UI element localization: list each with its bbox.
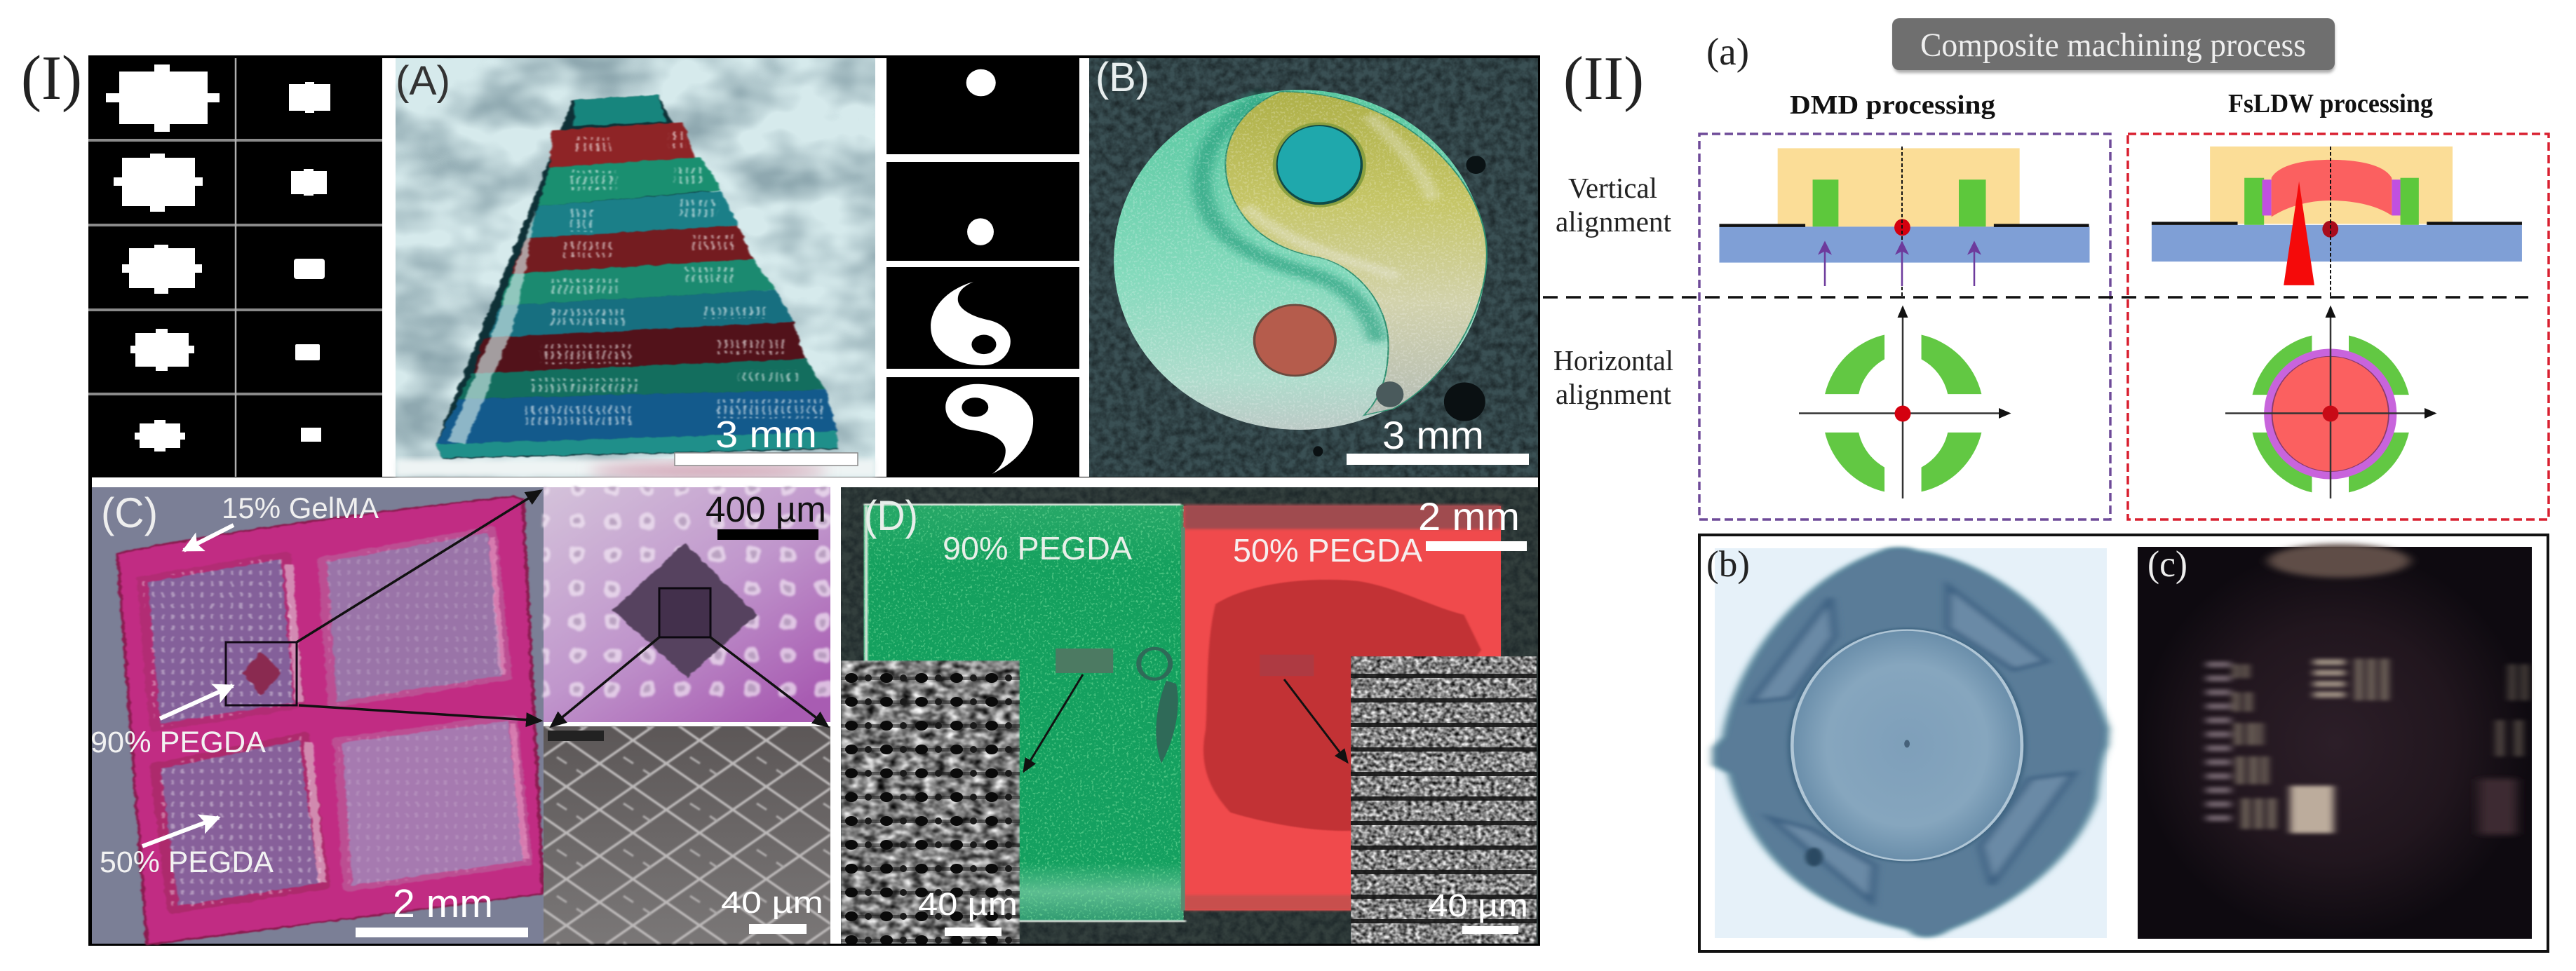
dark diamond <box>613 543 757 677</box>
white separator <box>830 487 841 944</box>
scale text: 2 mm: 2 mm <box>1418 494 1520 538</box>
white separator band <box>92 477 1538 487</box>
axes <box>1799 307 2009 498</box>
center dot <box>1895 405 1910 422</box>
scale bar <box>945 928 1002 936</box>
D inset arrows <box>1024 674 1347 771</box>
label: (D): (D) <box>864 492 918 539</box>
inner zoom box <box>659 588 710 637</box>
scale bar <box>1462 926 1518 934</box>
white arrows <box>142 525 234 846</box>
row label: vertical alignment: alignment <box>1556 205 1672 238</box>
panel: A pyramid photo <box>382 58 886 478</box>
green and red gels <box>864 505 1501 921</box>
panel: D gel photo <box>841 487 1538 944</box>
panel: C SEM lattice <box>544 722 830 944</box>
horizontal alignment diagram <box>1825 335 1981 491</box>
scale text: 40 µm: 40 µm <box>721 885 823 920</box>
heading: DMD processing: DMD processing <box>1790 90 1995 120</box>
label: 15% GelMA: 15% GelMA <box>222 491 379 524</box>
axes <box>2225 307 2435 498</box>
SEM info tag <box>548 731 604 741</box>
button: composite machining process <box>1892 18 2335 73</box>
row label: vertical alignment <box>1556 172 1672 238</box>
left column cross shapes <box>106 64 220 451</box>
row label: horizontal alignment: alignment <box>1556 378 1672 410</box>
yin-yang disc <box>1114 90 1487 430</box>
scale bar <box>1426 541 1527 551</box>
panel: B yin-yang photo <box>1089 55 1538 477</box>
panel: (c) imaging test pattern <box>2138 544 2532 939</box>
purple arrows <box>1825 243 1974 286</box>
mottled background <box>396 58 875 477</box>
panel: (b) microlens image <box>1706 544 2108 938</box>
label: (c): (c) <box>2147 544 2187 585</box>
lens object <box>1714 548 2108 937</box>
pyramid layers <box>436 95 837 459</box>
pink floor <box>396 459 875 477</box>
scale bar <box>749 924 807 934</box>
row label: horizontal alignment <box>1553 344 1673 410</box>
scale text: 3 mm: 3 mm <box>1382 413 1484 457</box>
mask shapes <box>931 69 1033 474</box>
panel: DMD processing schematic <box>1699 134 2110 520</box>
panel: FsLDW processing schematic <box>2128 134 2549 520</box>
label: 50% PEGDA: 50% PEGDA <box>1233 532 1422 569</box>
scale bar <box>675 453 858 466</box>
dark background noise <box>1089 58 1538 477</box>
red dashed box <box>2128 134 2549 520</box>
zoom box <box>226 642 297 705</box>
panel: D right SEM inset <box>1351 656 1537 944</box>
scale text: 2 mm: 2 mm <box>393 881 493 926</box>
vertical alignment diagram <box>2152 147 2522 285</box>
disc texture <box>1114 90 1485 430</box>
green speckle <box>864 505 1184 920</box>
button: composite machining process: Composite machining process <box>1920 27 2306 64</box>
scale text: 400 µm: 400 µm <box>706 489 826 529</box>
gel outlines and marks <box>864 505 1314 921</box>
heading: FsLDW processing: FsLDW processing <box>2228 89 2433 118</box>
row label: horizontal alignment: Horizontal <box>1553 344 1673 376</box>
panel: D left SEM inset <box>841 660 1020 944</box>
row label: vertical alignment: Vertical <box>1568 172 1657 204</box>
scale text: 3 mm: 3 mm <box>715 414 817 456</box>
scale bar <box>717 529 818 540</box>
horizontal alignment diagram <box>2253 336 2409 492</box>
center dashed line <box>1901 147 1903 297</box>
label: 90% PEGDA: 90% PEGDA <box>90 726 266 759</box>
label: (b): (b) <box>1706 544 1750 585</box>
panel: C gel photo <box>90 487 544 944</box>
panel: yin-yang mask slices <box>886 58 1089 477</box>
center dashed line <box>2330 147 2331 297</box>
inlay circles and blots <box>1253 122 1485 456</box>
scale bar <box>356 928 528 937</box>
label: (B): (B) <box>1095 55 1149 100</box>
label: (C): (C) <box>101 489 158 536</box>
label: (I): (I) <box>21 43 82 113</box>
purple dashed box <box>1699 134 2110 520</box>
panel: C zoomed optical image <box>544 487 830 722</box>
right column small shapes <box>289 82 330 442</box>
pink gel and wells <box>117 496 544 944</box>
black zoom arrows <box>297 491 828 726</box>
mask grid dividers <box>88 140 382 394</box>
label: 50% PEGDA: 50% PEGDA <box>100 846 274 879</box>
center dot <box>2323 405 2338 422</box>
scale text: 40 µm: 40 µm <box>918 886 1018 922</box>
horizontal dashed divider <box>1543 296 2528 299</box>
bottom result box <box>1699 535 2548 951</box>
label: (II): (II) <box>1563 45 1644 113</box>
label: 90% PEGDA: 90% PEGDA <box>943 530 1132 566</box>
label: (A): (A) <box>396 58 450 104</box>
scale bar <box>1347 454 1529 465</box>
panel I frame <box>88 55 1540 946</box>
panel: mask slices <box>88 58 382 477</box>
vertical alignment diagram <box>1719 148 2089 263</box>
blurred resolution target <box>2206 544 2528 834</box>
label: (a): (a) <box>1706 30 1749 73</box>
scale text: 40 µm: 40 µm <box>1428 888 1528 923</box>
